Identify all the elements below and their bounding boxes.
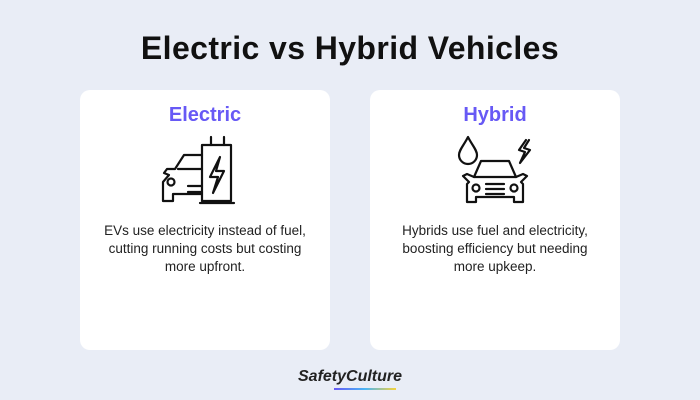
- text: electric: EVs use electricity instead of fuel, cutting running costs but costing more upfront.: [104, 223, 306, 274]
- text: hybrid: Hybrids use fuel and electricity, boosting efficiency but needing more upkeep.: [402, 223, 588, 274]
- panel: hybrid: [370, 90, 620, 350]
- title: Electric vs Hybrid Vehicles: [141, 30, 559, 66]
- panel: electric: [80, 90, 330, 350]
- icon: EV charger with car: [162, 136, 236, 204]
- icon: hybrid car with drop and bolt: [458, 136, 532, 204]
- heading: electric: Electric: [169, 104, 241, 126]
- heading: hybrid: Hybrid: [463, 104, 527, 126]
- logo: SafetyCulture: SafetyCulture: [298, 368, 402, 385]
